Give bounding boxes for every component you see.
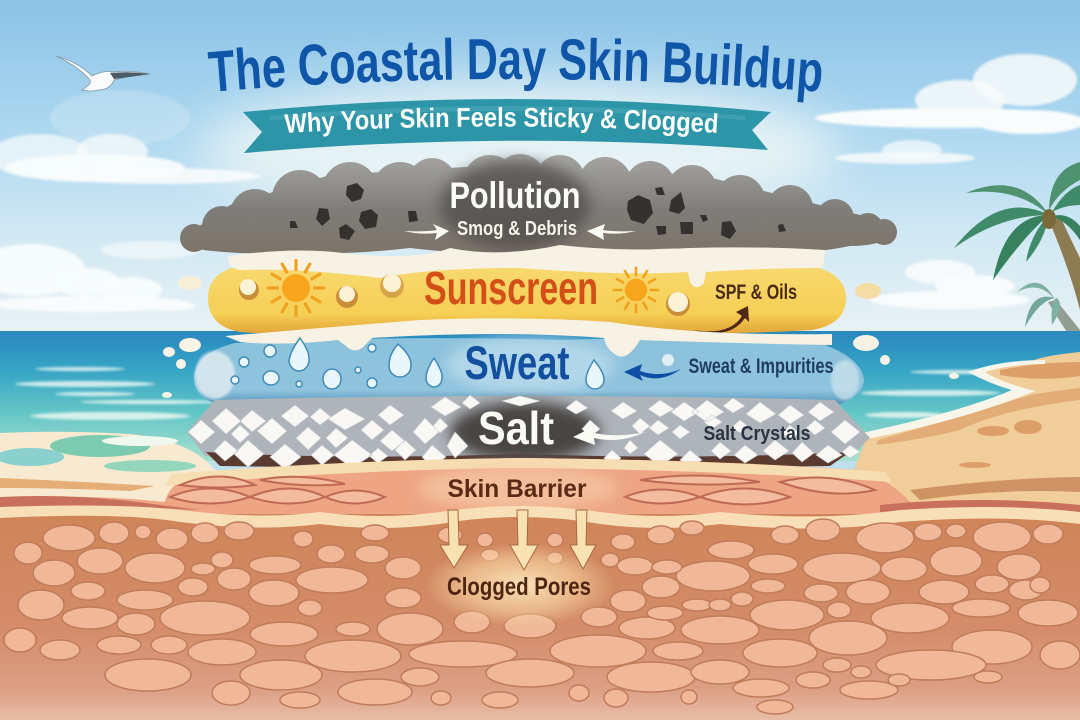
glow behind clogged pores	[425, 543, 615, 627]
sunscreen label: Sunscreen	[424, 262, 598, 314]
icon: sun left	[267, 259, 325, 317]
salt crystals	[188, 395, 860, 469]
wavy band	[0, 506, 1080, 529]
sand right	[850, 352, 1080, 520]
subtitle text: Why Your Skin Feels Sticky & Clogged	[284, 107, 718, 137]
sand details	[876, 362, 1080, 500]
sand left	[0, 432, 240, 510]
salt label: Salt	[478, 402, 554, 454]
icon: sun right	[613, 267, 659, 313]
pollution label: Pollution	[450, 175, 580, 216]
sea foam	[15, 367, 1010, 420]
title: The Coastal Day Skin Buildup	[208, 38, 822, 102]
oil droplets	[239, 274, 690, 316]
pore arrows	[440, 510, 596, 570]
dark centre behind label	[440, 161, 590, 249]
arrow: blue left	[624, 364, 681, 381]
impurities label: Sweat & Impurities	[688, 355, 834, 378]
debris particles	[290, 183, 786, 240]
sea	[0, 331, 1080, 461]
arrow: curved up	[693, 306, 749, 333]
clogged pores label: Clogged Pores	[447, 573, 591, 601]
shore foam	[862, 360, 1045, 440]
layer: pollution cloud	[180, 154, 897, 254]
layer: salt	[187, 395, 870, 470]
arrow: white left	[573, 426, 645, 445]
cream layer one	[228, 245, 825, 287]
cobblestone cells	[4, 519, 1080, 714]
arrow: right pointing	[404, 224, 449, 240]
sweat label: Sweat	[464, 336, 570, 389]
layer: lower skin cells	[0, 506, 1080, 720]
layer: sunscreen	[208, 245, 846, 335]
crystals label: Salt Crystals	[704, 423, 810, 445]
floating cream and salt blobs	[162, 276, 959, 398]
smog label: Smog & Debris	[457, 218, 577, 240]
palm trees	[954, 162, 1080, 352]
layer: sweat	[194, 318, 864, 410]
tide pools	[0, 435, 196, 472]
cream layer two	[225, 318, 832, 357]
sand band left	[0, 478, 155, 491]
skin barrier label: Skin Barrier	[448, 475, 587, 503]
subtitle ribbon	[243, 99, 771, 153]
sky background	[0, 0, 1080, 335]
seagull icon	[56, 56, 150, 91]
spf label: SPF & Oils	[715, 281, 797, 304]
layer: skin barrier	[0, 458, 1080, 540]
water droplets	[231, 338, 674, 389]
arrow: left pointing	[587, 224, 636, 240]
clouds	[0, 54, 1080, 312]
woven skin cells	[170, 475, 875, 504]
